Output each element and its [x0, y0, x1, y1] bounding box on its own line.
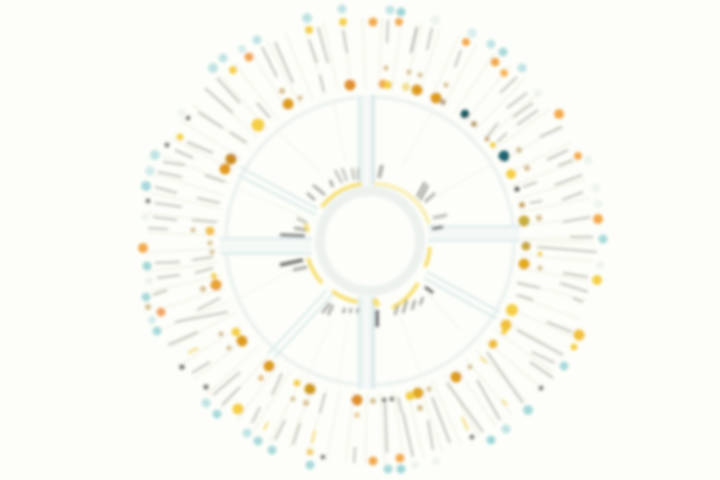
orange markers — [138, 18, 603, 466]
pale markers — [141, 15, 604, 469]
gold ring markers — [210, 84, 530, 398]
blue spoke: left — [220, 237, 312, 255]
inner label bars — [280, 165, 447, 327]
radial spokes — [182, 53, 558, 429]
inner ring — [320, 191, 420, 291]
outer label bars — [148, 20, 597, 463]
yellow category arcs — [306, 184, 430, 308]
blue spoke: top — [357, 95, 375, 185]
yellow short bars — [188, 348, 507, 443]
tan small markers — [145, 66, 542, 418]
dark markers — [146, 110, 544, 460]
blue spoke: right — [428, 225, 520, 242]
faint interior connectors — [235, 100, 490, 385]
blue spoke: diagonals — [238, 167, 500, 358]
teal markers — [141, 4, 608, 474]
blue spoke: bottom — [357, 297, 375, 389]
yellow markers — [176, 18, 602, 456]
outer ring — [226, 97, 514, 385]
